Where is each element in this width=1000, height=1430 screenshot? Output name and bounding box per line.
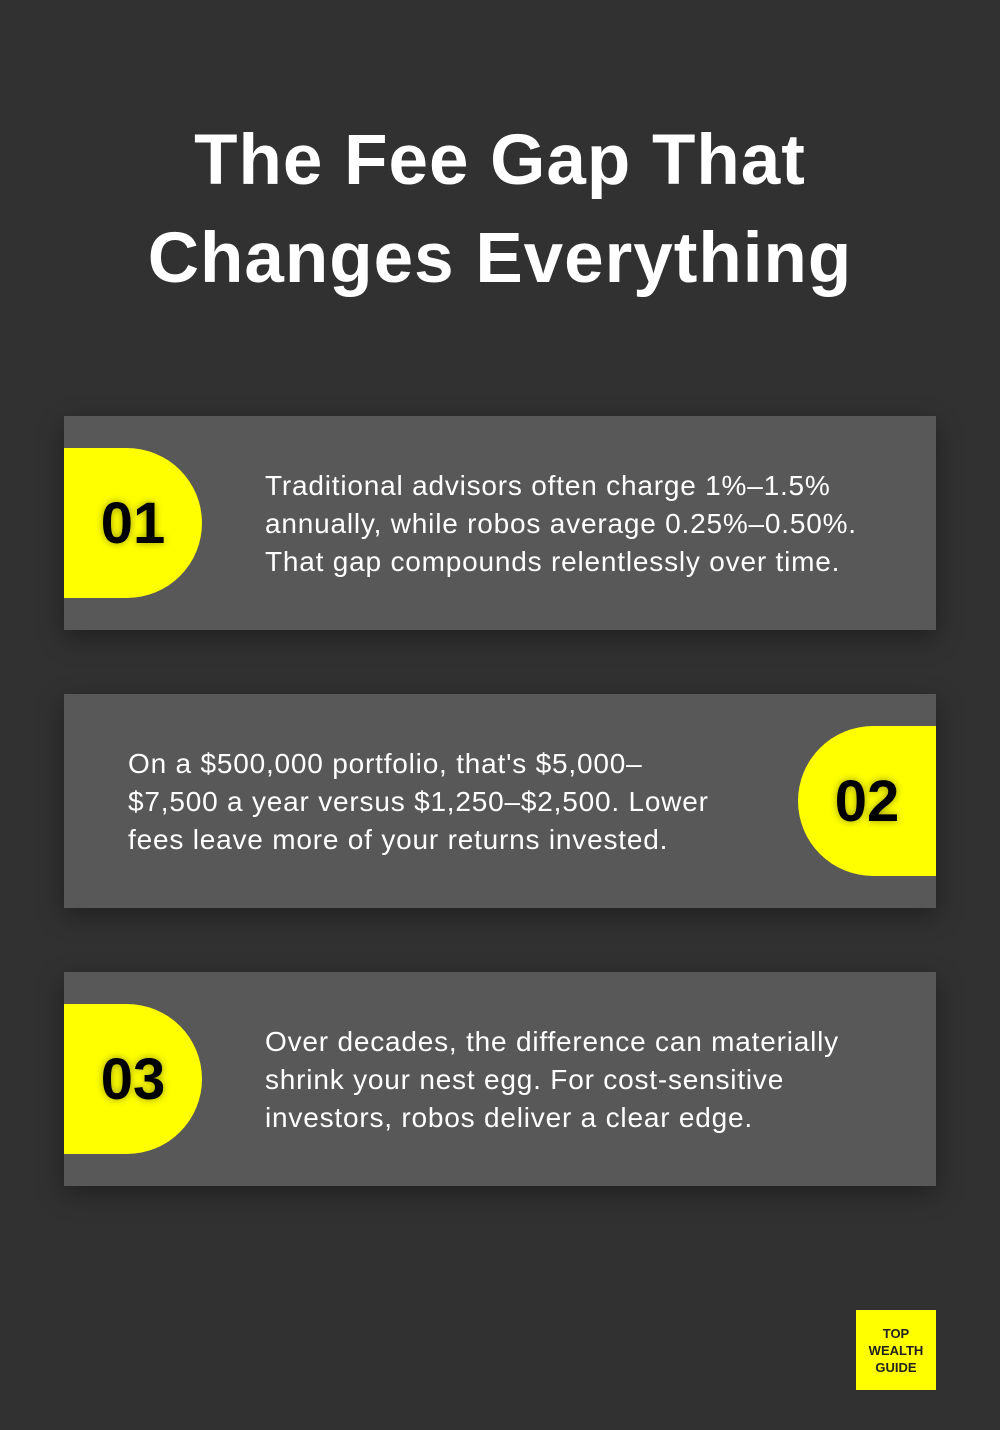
text 03: shrink your nest egg. For cost-sensitive [265,1064,784,1095]
title: The Fee Gap That [194,121,806,200]
panel: step 03 [64,972,936,1186]
panel: step 01 [64,416,936,630]
logo [856,1310,936,1390]
text 03 [265,1026,839,1133]
badge 01 [64,448,202,598]
logo: TOP [883,1326,909,1340]
text 03: investors, robos deliver a clear edge. [265,1102,753,1133]
text 02: On a $500,000 portfolio, that's $5,000– [128,748,642,779]
badge 02 [798,726,936,876]
logo: WEALTH [869,1342,923,1358]
text 03: Over decades, the difference can materially [265,1026,839,1057]
title [148,121,852,298]
badge 01: 01 [101,490,165,556]
badge 02: 02 [835,768,899,834]
text 01 [265,470,857,577]
logo: GUIDE [875,1360,917,1374]
text 01: Traditional advisors often charge 1%–1.5% [265,470,831,501]
text 01: That gap compounds relentlessly over time. [265,546,840,577]
panel: step 02 [64,694,936,908]
text 02: fees leave more of your returns invested. [128,824,668,855]
text 01: annually, while robos average 0.25%–0.50%. [265,508,857,539]
title: Changes Everything [148,219,852,298]
badge 03 [64,1004,202,1154]
text 02 [128,748,709,855]
text 02: $7,500 a year versus $1,250–$2,500. Lower [128,786,709,817]
badge 03: 03 [101,1046,165,1112]
